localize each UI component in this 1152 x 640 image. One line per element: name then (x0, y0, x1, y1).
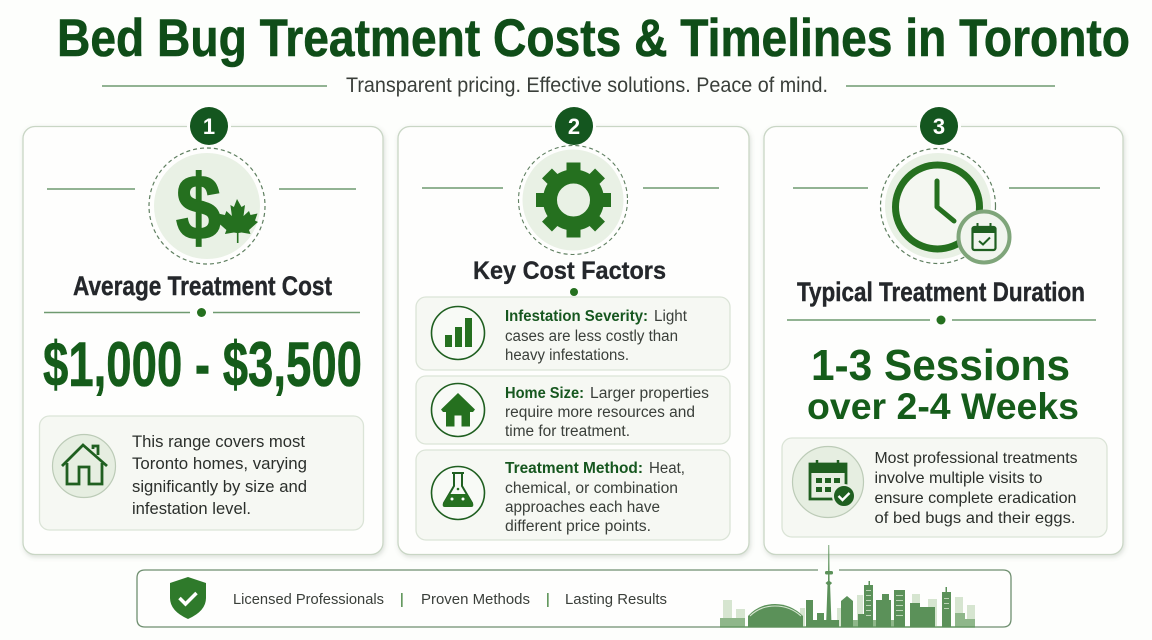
callout text (132, 433, 307, 518)
factor text: chemical, or combination (505, 480, 678, 497)
panel: average treatment cost (23, 104, 383, 554)
factor text: Home Size: (505, 385, 584, 402)
factor text (505, 460, 685, 535)
footer banner (137, 545, 1011, 627)
step badge 2 (552, 104, 596, 148)
factor text (505, 385, 709, 440)
factor text: cases are less costly than (505, 328, 678, 345)
factor: home size (416, 376, 730, 444)
session count: 1-3 Sessions (811, 341, 1070, 390)
divider (44, 308, 360, 317)
step badge 3 (917, 104, 961, 148)
callout text: Most professional treatments (874, 450, 1078, 467)
callout: range note (40, 416, 364, 530)
icon: dollar and maple leaf: $ (176, 157, 221, 259)
trust points: | (400, 592, 404, 608)
trust points: Licensed Professionals (233, 592, 384, 608)
divider dot (570, 288, 578, 296)
step badge 2: 2 (568, 114, 580, 139)
factor text: Treatment Method: (505, 460, 643, 477)
heading: Typical Treatment Duration (797, 277, 1085, 307)
step badge 1: 1 (203, 114, 215, 139)
trust points: | (546, 592, 550, 608)
panel: key cost factors (398, 104, 749, 554)
icon: gear (422, 146, 719, 254)
divider (787, 316, 1096, 324)
step badge 1 (187, 104, 231, 148)
step badge 3: 3 (933, 114, 945, 139)
callout text: infestation level. (132, 500, 251, 518)
trust points: Lasting Results (565, 592, 667, 608)
factor text (505, 308, 688, 364)
factor text: Infestation Severity: (505, 308, 648, 325)
icon: flask (432, 466, 484, 520)
heading: Key Cost Factors (473, 257, 666, 285)
icon: clock with calendar (793, 148, 1100, 264)
factor: treatment method (416, 450, 730, 540)
icon: house outline (52, 434, 116, 498)
icon: dollar and maple leaf (47, 148, 356, 264)
callout text: of bed bugs and their eggs. (874, 510, 1076, 527)
callout text: This range covers most (132, 433, 305, 451)
factor text: Larger properties (590, 385, 709, 402)
check mark (180, 593, 196, 604)
factor text: Heat, (649, 460, 685, 477)
icon: bars (432, 306, 484, 360)
icon: shield check (170, 577, 206, 619)
factor text: approaches each have (505, 499, 660, 516)
cost range: $1,000 - $3,500 (43, 330, 362, 400)
factor text: Light (654, 308, 688, 325)
callout text: involve multiple visits to (874, 470, 1043, 487)
trust points: Proven Methods (421, 592, 530, 608)
Toronto skyline (720, 545, 975, 627)
icon: calendar check (792, 446, 864, 518)
trust points (233, 592, 667, 608)
callout text: ensure complete eradication (874, 490, 1076, 507)
callout text (874, 450, 1078, 527)
factor text: require more resources and (505, 404, 695, 421)
panel: typical treatment duration (764, 104, 1123, 554)
heading: Average Treatment Cost (73, 271, 332, 301)
factor text: different price points. (505, 518, 651, 535)
callout: visits note (782, 438, 1107, 537)
callout text: Toronto homes, varying (132, 455, 307, 473)
factor text: time for treatment. (505, 423, 630, 440)
factor: infestation severity (416, 297, 730, 370)
factor text: heavy infestations. (505, 347, 629, 364)
session period: over 2-4 Weeks (807, 386, 1079, 427)
callout text: significantly by size and (132, 478, 307, 496)
subtitle: Transparent pricing. Effective solutions. Peace of mind. (346, 74, 828, 97)
icon: house (432, 384, 484, 436)
